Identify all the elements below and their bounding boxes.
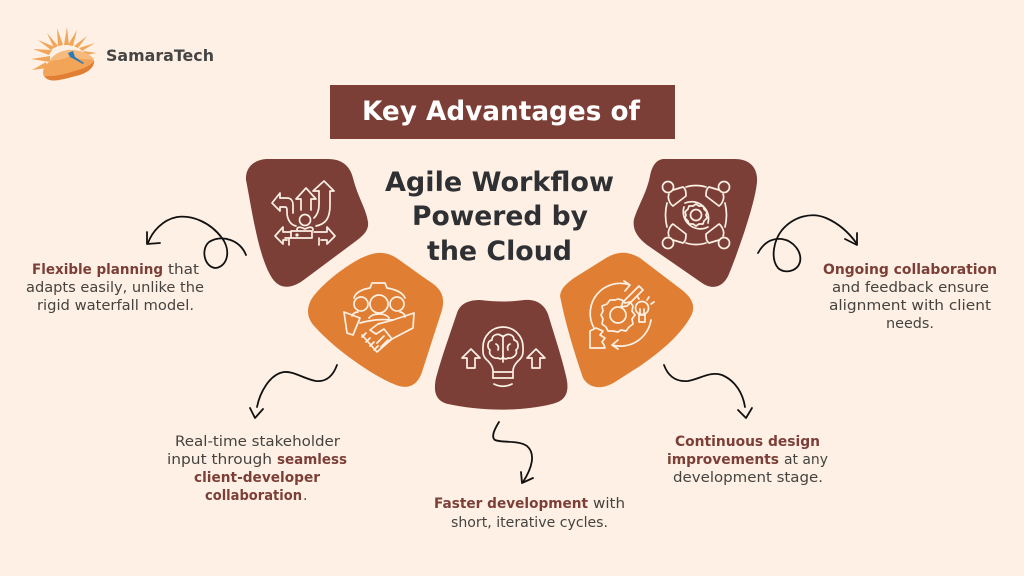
- text: stakeholder input: Real-time stakeholder: [175, 434, 340, 450]
- panel: stakeholder collaboration shape: [308, 253, 443, 387]
- text: flexible planning: Flexible planning: [32, 262, 163, 278]
- text: faster development: short, iterative cycles.: [451, 515, 608, 531]
- text: stakeholder input: collaboration: [205, 488, 302, 504]
- subtitle: Agile Workflow: [385, 167, 614, 198]
- text: design improvements: development stage.: [673, 470, 823, 486]
- text: design improvements: [667, 434, 828, 486]
- text: stakeholder input: client-developer: [194, 470, 320, 486]
- text: flexible planning: adapts easily, unlike the: [26, 280, 204, 296]
- panel: ongoing collaboration shape: [634, 159, 757, 287]
- arrow: stakeholder input: [250, 365, 337, 418]
- arrow: flexible planning: [147, 217, 246, 268]
- logo: SamaraTech: [31, 27, 214, 81]
- text: stakeholder input: .: [303, 488, 307, 504]
- icon: sun shell logo: [31, 27, 97, 81]
- text: stakeholder input: seamless: [277, 452, 347, 468]
- logo wordmark: SamaraTech: [106, 46, 214, 65]
- text: flexible planning: rigid waterfall model.: [37, 298, 194, 314]
- text: flexible planning: [26, 262, 204, 314]
- text: flexible planning: that: [168, 262, 200, 278]
- text: faster development: with: [593, 496, 625, 512]
- text: ongoing collaboration: Ongoing collaboration: [823, 262, 997, 278]
- subtitle: [385, 167, 614, 267]
- icon: team around gear: [662, 182, 730, 248]
- text: ongoing collaboration: alignment with client: [829, 298, 992, 314]
- icon: branching arrows: [272, 181, 335, 245]
- text: faster development: Faster development: [434, 496, 588, 512]
- text: stakeholder input: [167, 434, 347, 504]
- text: design improvements: Continuous design: [675, 434, 820, 450]
- subtitle: the Cloud: [427, 236, 572, 267]
- text: ongoing collaboration: needs.: [886, 316, 934, 332]
- panel: faster development shape: [435, 300, 567, 410]
- icon: handshake with team and gear: [344, 283, 414, 352]
- text: design improvements: at any: [784, 452, 828, 468]
- text: ongoing collaboration: [823, 262, 997, 332]
- arrow: ongoing collaboration: [758, 215, 857, 271]
- panel: design improvements shape: [560, 253, 693, 387]
- icon: gear cycle with pencil and bulb: [590, 281, 654, 349]
- panel: flexible planning shape: [246, 159, 368, 287]
- arrow: faster development: [493, 422, 533, 483]
- text: faster development: [434, 496, 625, 531]
- text: ongoing collaboration: and feedback ensure: [832, 280, 989, 296]
- arrow: design improvements: [664, 365, 752, 418]
- title bar: Key Advantages of: [362, 96, 640, 127]
- icon: brain lightbulb with arrows: [462, 327, 545, 386]
- text: stakeholder input: input through: [167, 452, 272, 468]
- text: design improvements: improvements: [667, 452, 779, 468]
- subtitle: Powered by: [412, 201, 588, 232]
- title bar: [330, 85, 675, 139]
